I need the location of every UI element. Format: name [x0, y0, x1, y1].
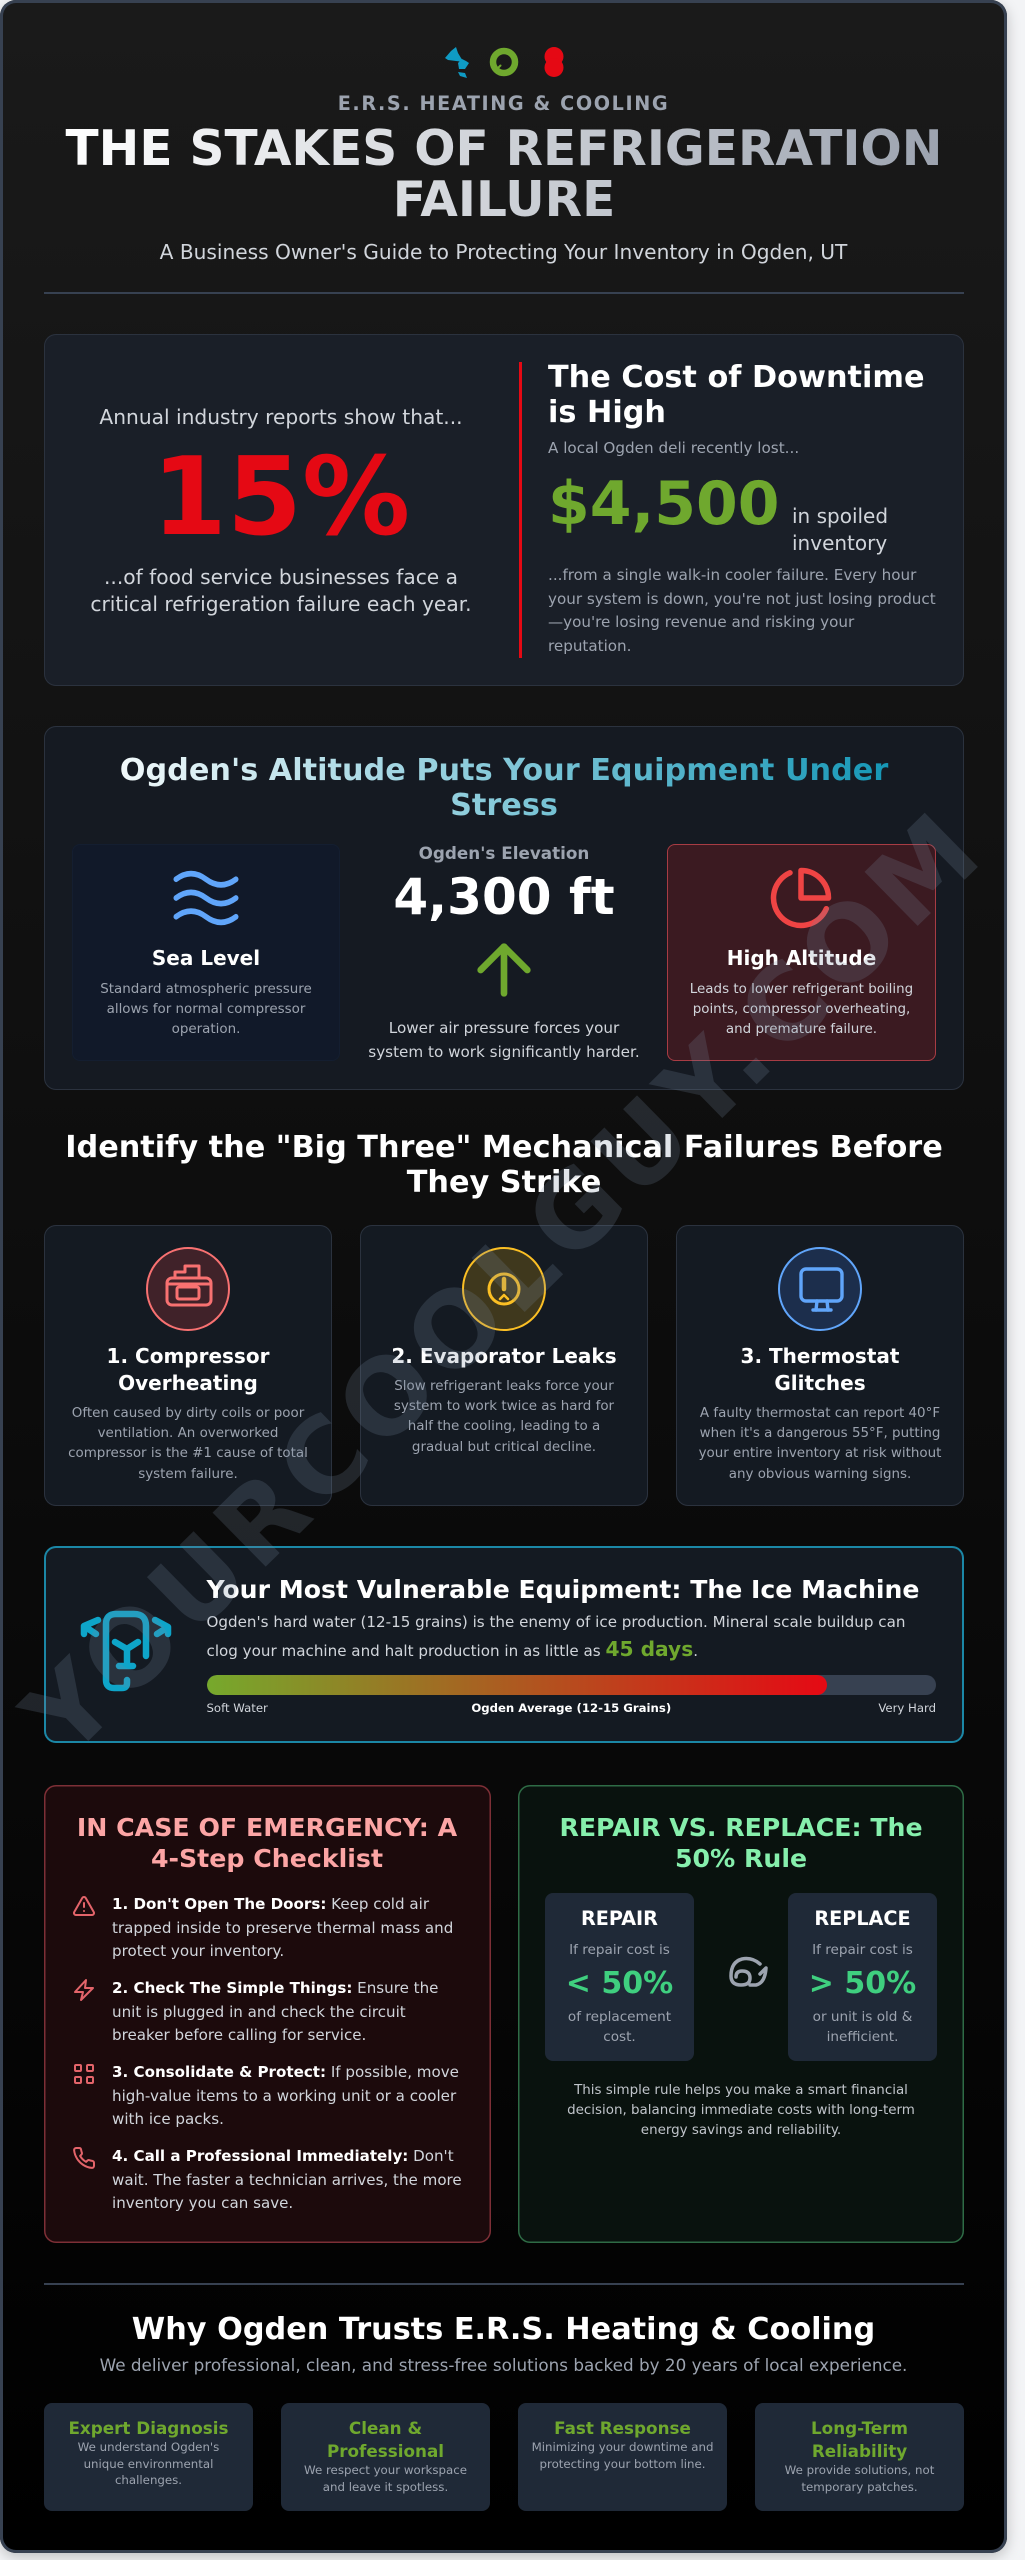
card: repair: [545, 1893, 694, 2061]
expert diagnosis text: unique environmental: [84, 2457, 213, 2471]
clean and professional text: [281, 2462, 490, 2495]
step 3: [74, 2063, 459, 2128]
icon: bolt: [74, 1979, 94, 2001]
evaporator description: Slow refrigerant leaks force your: [394, 1379, 614, 1394]
compressor description: Often caused by dirty coils or poor: [72, 1406, 304, 1421]
repair vs replace heading: [559, 1813, 923, 1873]
downtime paragraph: ...from a single walk-in cooler failure. Every hour: [548, 566, 916, 584]
repair vs replace heading: 50% Rule: [675, 1844, 807, 1873]
statistic description: critical refrigeration failure each year.: [90, 592, 472, 616]
repair vs replace heading: REPAIR VS. REPLACE: The: [559, 1813, 923, 1842]
rule explanation: [518, 2081, 964, 2141]
fast response text: protecting your bottom line.: [539, 2457, 706, 2471]
evaporator description: half the cooling, leading to a: [408, 1419, 600, 1434]
15% statistic: 15%: [152, 435, 410, 560]
altitude heading: [72, 754, 936, 823]
icon: green ring logo mark: [490, 48, 518, 76]
company name: E.R.S. HEATING & COOLING: [338, 92, 669, 115]
icon: swirl arrow: [729, 1956, 768, 1987]
step 4 text: [112, 2147, 462, 2212]
spoiled inventory note: [792, 504, 888, 555]
statistic description: ...of food service businesses face a: [104, 565, 458, 589]
expert diagnosis text: We understand Ogden's: [78, 2440, 219, 2454]
trust heading: Why Ogden Trusts E.R.S. Heating & Cooling: [132, 2312, 875, 2347]
panel: thermostat glitches: [676, 1225, 964, 1506]
rule explanation: energy savings and reliability.: [641, 2123, 841, 2138]
repair note: of replacement: [568, 2009, 671, 2025]
icon: waves: [174, 870, 238, 926]
ice machine paragraph: [206, 1613, 905, 1661]
replace note: or unit is old &: [813, 2009, 912, 2025]
thermostat description: any obvious warning signs.: [729, 1467, 911, 1482]
deli lead-in: A local Ogden deli recently lost...: [548, 439, 799, 457]
big three heading: [65, 1130, 943, 1200]
step 4 text: wait. The faster a technician arrives, the more: [112, 2171, 462, 2189]
fast response title: Fast Response: [554, 2418, 691, 2438]
card: clean and professional: [281, 2403, 490, 2511]
downtime paragraph: —you're losing revenue and risking your: [548, 613, 854, 631]
icon: evaporator warning: [462, 1247, 546, 1331]
replace label: REPLACE: [814, 1907, 911, 1930]
statistic description: [90, 565, 472, 616]
fast response text: [518, 2439, 727, 2472]
clean and professional text: and leave it spotless.: [323, 2480, 448, 2494]
emergency heading: [77, 1813, 457, 1873]
step 2 text: 2. Check The Simple Things: Ensure the: [112, 1979, 438, 1997]
elevation column: [368, 843, 640, 1061]
high altitude label: High Altitude: [727, 946, 876, 970]
expert diagnosis text: challenges.: [115, 2473, 182, 2487]
card: high altitude: [667, 844, 936, 1061]
icon: pie gauge: [770, 868, 832, 928]
main title: FAILURE: [393, 172, 615, 228]
repair note: cost.: [603, 2029, 636, 2045]
rule explanation: decision, balancing immediate costs with long-term: [567, 2103, 915, 2118]
altitude heading: Ogden's Altitude Puts Your Equipment Under: [120, 753, 888, 788]
step 1 text: trapped inside to preserve thermal mass and: [112, 1919, 453, 1937]
compressor description: ventilation. An overworked: [98, 1426, 278, 1441]
step 4 text: inventory you can save.: [112, 2194, 293, 2212]
emergency heading: 4-Step Checklist: [151, 1844, 383, 1873]
downtime heading: The Cost of Downtime: [548, 360, 924, 395]
watermark: YOURCOOLGUY.COM: [0, 786, 1007, 1778]
thermostat title: Glitches: [774, 1371, 866, 1395]
ice machine paragraph: clog your machine and halt production in as little as 45 days.: [206, 1637, 698, 1661]
panel: ice machine: [44, 1546, 964, 1743]
step 1 text: 1. Don't Open The Doors: Keep cold air: [112, 1895, 429, 1913]
thermostat description: A faulty thermostat can report 40°F: [700, 1406, 940, 1421]
main title: [62, 124, 946, 226]
bar label: ogden average: Ogden Average (12-15 Grains): [471, 1701, 671, 1715]
icon: up arrow: [477, 943, 531, 997]
long-term reliability title: Reliability: [812, 2441, 907, 2461]
step 3 text: high-value items to a working unit or a cooler: [112, 2087, 456, 2105]
high altitude description: Leads to lower refrigerant boiling: [690, 982, 913, 997]
bar label: very hard: Very Hard: [878, 1701, 936, 1715]
sea level description: [100, 982, 312, 1037]
bar label: soft water: Soft Water: [206, 1701, 268, 1715]
long-term reliability text: temporary patches.: [801, 2480, 918, 2494]
compressor description: compressor is the #1 cause of total: [68, 1446, 308, 1461]
downtime paragraph: reputation.: [548, 637, 631, 655]
panel: evaporator leaks: [360, 1225, 648, 1506]
step 2 text: [112, 1979, 438, 2044]
icon: thermostat monitor: [778, 1247, 862, 1331]
expert diagnosis text: [44, 2439, 253, 2489]
high altitude description: and premature failure.: [726, 1022, 877, 1037]
downtime paragraph: your system is down, you're not just losing product: [548, 590, 936, 608]
icon: warning triangle: [73, 1896, 95, 1916]
evaporator title: 2. Evaporator Leaks: [391, 1344, 617, 1368]
subtitle: A Business Owner's Guide to Protecting Your Inventory in Ogden, UT: [160, 240, 847, 264]
repair condition: If repair cost is: [569, 1942, 670, 1958]
$4,500 figure: $4,500: [548, 469, 780, 539]
thermostat description: your entire inventory at risk without: [699, 1446, 941, 1461]
icon: compressor: [146, 1247, 230, 1331]
downtime heading: is High: [548, 394, 666, 430]
card: long-term reliability: [755, 2403, 964, 2511]
fast response text: Minimizing your downtime and: [532, 2440, 713, 2454]
compressor title: [107, 1344, 270, 1395]
clean and professional text: We respect your workspace: [304, 2463, 467, 2477]
clean and professional title: [281, 2417, 490, 2463]
emergency heading: IN CASE OF EMERGENCY: A: [77, 1813, 457, 1842]
long-term reliability title: [755, 2417, 964, 2463]
card: sea level: [72, 844, 340, 1061]
thermostat title: [741, 1344, 899, 1395]
repair threshold: < 50%: [566, 1966, 673, 2001]
step 2: [74, 1979, 438, 2044]
panel: compressor overheating: [44, 1225, 332, 1506]
step 3 text: [112, 2063, 459, 2128]
step 2 text: unit is plugged in and check the circuit: [112, 2003, 406, 2021]
expert diagnosis title: Expert Diagnosis: [68, 2418, 229, 2438]
spoiled inventory note: in spoiled: [792, 504, 888, 528]
sea level description: Standard atmospheric pressure: [100, 982, 312, 997]
replace threshold: > 50%: [809, 1966, 916, 2001]
sea level description: allows for normal compressor: [107, 1002, 305, 1017]
icon: ice machine: [80, 1610, 172, 1692]
thermostat description: [699, 1406, 942, 1482]
big three heading: Identify the "Big Three" Mechanical Failures Before: [65, 1130, 943, 1165]
step 1 text: protect your inventory.: [112, 1942, 284, 1960]
evaporator description: gradual but critical decline.: [412, 1440, 596, 1455]
elevation note: [368, 1019, 640, 1061]
step 3 text: with ice packs.: [112, 2110, 224, 2128]
thermostat description: when it's a dangerous 55°F, putting: [700, 1426, 940, 1441]
downtime heading: [548, 360, 924, 430]
compressor title: 1. Compressor: [107, 1344, 269, 1368]
replace condition: If repair cost is: [812, 1942, 913, 1958]
4,300 ft figure: 4,300 ft: [393, 868, 615, 926]
repair note: [568, 2009, 671, 2045]
elevation note: system to work significantly harder.: [368, 1043, 640, 1061]
thermostat title: 3. Thermostat: [741, 1344, 899, 1368]
panel: cost of downtime: [44, 334, 964, 686]
elevation label: Ogden's Elevation: [419, 843, 589, 863]
compressor description: system failure.: [138, 1467, 238, 1482]
compressor title: Overheating: [118, 1371, 258, 1395]
main title: THE STAKES OF REFRIGERATION: [66, 121, 942, 177]
step 2 text: breaker before calling for service.: [112, 2026, 366, 2044]
panel: repair vs replace: [518, 1785, 964, 2243]
step 4: [73, 2147, 462, 2212]
ice machine heading: Your Most Vulnerable Equipment: The Ice Machine: [206, 1575, 919, 1604]
long-term reliability text: We provide solutions, not: [785, 2463, 934, 2477]
sea level description: operation.: [172, 1022, 240, 1037]
card: fast response: [518, 2403, 727, 2511]
evaporator description: system to work twice as hard for: [394, 1399, 614, 1414]
ice machine paragraph: Ogden's hard water (12-15 grains) is the enemy of ice production. Mineral scale buildup can: [206, 1613, 905, 1631]
annual reports lead-in: Annual industry reports show that...: [99, 405, 463, 429]
header logo icons: [445, 47, 564, 78]
step 1: [73, 1895, 453, 1960]
replace note: inefficient.: [827, 2029, 898, 2045]
sea level label: Sea Level: [152, 946, 260, 970]
high altitude description: [690, 982, 913, 1037]
replace note: [813, 2009, 912, 2045]
panel: emergency checklist: [44, 1785, 491, 2243]
big three heading: They Strike: [407, 1164, 601, 1200]
step 1 text: [112, 1895, 453, 1960]
step 4 text: 4. Call a Professional Immediately: Don't: [112, 2147, 454, 2165]
clean and professional title: Professional: [327, 2441, 444, 2461]
trust subtitle: We deliver professional, clean, and stress-free solutions backed by 20 years of local experience.: [100, 2355, 907, 2375]
elevation note: Lower air pressure forces your: [389, 1019, 619, 1037]
clean and professional title: Clean &: [349, 2418, 422, 2438]
altitude heading: Stress: [450, 788, 558, 822]
icon: blue logo mark: [445, 47, 469, 78]
rule explanation: This simple rule helps you make a smart financial: [574, 2083, 908, 2098]
evaporator description: [394, 1379, 614, 1455]
step 3 text: 3. Consolidate & Protect: If possible, move: [112, 2063, 459, 2081]
long-term reliability text: [755, 2462, 964, 2495]
card: replace: [788, 1893, 937, 2061]
spoiled inventory note: inventory: [792, 531, 887, 555]
repair label: REPAIR: [581, 1907, 658, 1930]
water hardness bar: [206, 1675, 936, 1695]
panel: altitude: [44, 726, 964, 1090]
icon: phone: [73, 2147, 95, 2169]
compressor description: [68, 1406, 308, 1482]
downtime paragraph: [548, 566, 936, 655]
high altitude description: points, compressor overheating,: [693, 1002, 910, 1017]
icon: red logo mark: [544, 47, 564, 77]
card: expert diagnosis: [44, 2403, 253, 2511]
long-term reliability title: Long-Term: [811, 2418, 908, 2438]
icon: grid: [74, 2064, 94, 2084]
